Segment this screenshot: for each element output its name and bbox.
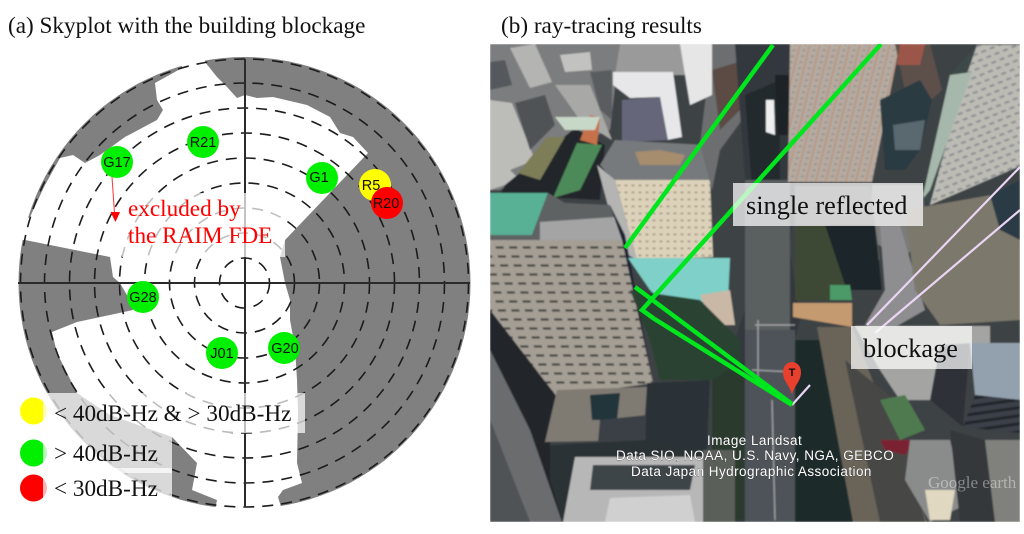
satellite R20: R20 [373, 196, 399, 212]
elevation rings [20, 59, 468, 507]
satellite R5: R5 [362, 178, 380, 194]
legend marker: green [20, 440, 47, 466]
satellite R21: R21 [190, 135, 216, 151]
icon: map pin T: T [789, 367, 796, 379]
satellite R20 [371, 187, 403, 219]
satellite G20 [268, 332, 300, 364]
attribution text [616, 433, 894, 479]
label: blockage: blockage [863, 334, 958, 363]
label: single reflected: single reflected [746, 191, 907, 220]
satellite G17: G17 [103, 155, 131, 171]
satellite J01: J01 [210, 346, 234, 362]
google earth watermark: Google earth [928, 473, 1017, 492]
satellite R21 [187, 126, 219, 158]
satellite G20: G20 [271, 341, 299, 357]
satellite G28: G28 [129, 290, 157, 306]
axes [18, 59, 470, 507]
aerial photo buildings [490, 44, 1020, 522]
satellite G1: G1 [309, 170, 329, 186]
satellite G1 [306, 162, 338, 194]
attribution line 1: Image Landsat [707, 433, 802, 448]
title: panel b heading: (b) ray-tracing results [501, 13, 702, 39]
satellite R5 [359, 169, 391, 201]
label: blockage [851, 326, 972, 369]
legend text: yellow: < 40dB-Hz & > 30dB-Hz [54, 401, 291, 427]
attribution line 2: Data SIO, NOAA, U.S. Navy, NGA, GEBCO [616, 448, 894, 463]
title: panel a heading: (a) Skyplot with the building blockage [8, 13, 365, 39]
label: single reflected [733, 183, 923, 226]
callout: excluded by the RAIM FDE: excluded by [128, 196, 241, 222]
callout: excluded by the RAIM FDE: the RAIM FDE [128, 223, 272, 249]
panel: skyplot [18, 57, 470, 508]
satellite G17 [101, 146, 133, 178]
legend text: red: < 30dB-Hz [54, 476, 158, 502]
legend [20, 393, 305, 502]
satellite J01 [206, 337, 238, 369]
attribution line 3: Data Japan Hydrographic Association [631, 464, 872, 479]
legend text: green: > 40dB-Hz [54, 441, 158, 467]
rays: blocked [792, 167, 1020, 405]
satellite G28 [127, 281, 159, 313]
icon: map pin T [783, 362, 801, 395]
legend marker: yellow [20, 398, 47, 424]
callout: excluded by the RAIM FDE [122, 193, 285, 257]
panel: aerial ray-tracing image [490, 44, 1020, 522]
building blockage grey regions [18, 57, 470, 507]
rays: single reflected [625, 44, 881, 405]
legend marker: red [20, 474, 47, 502]
arrow: excluded satellite [110, 177, 120, 222]
